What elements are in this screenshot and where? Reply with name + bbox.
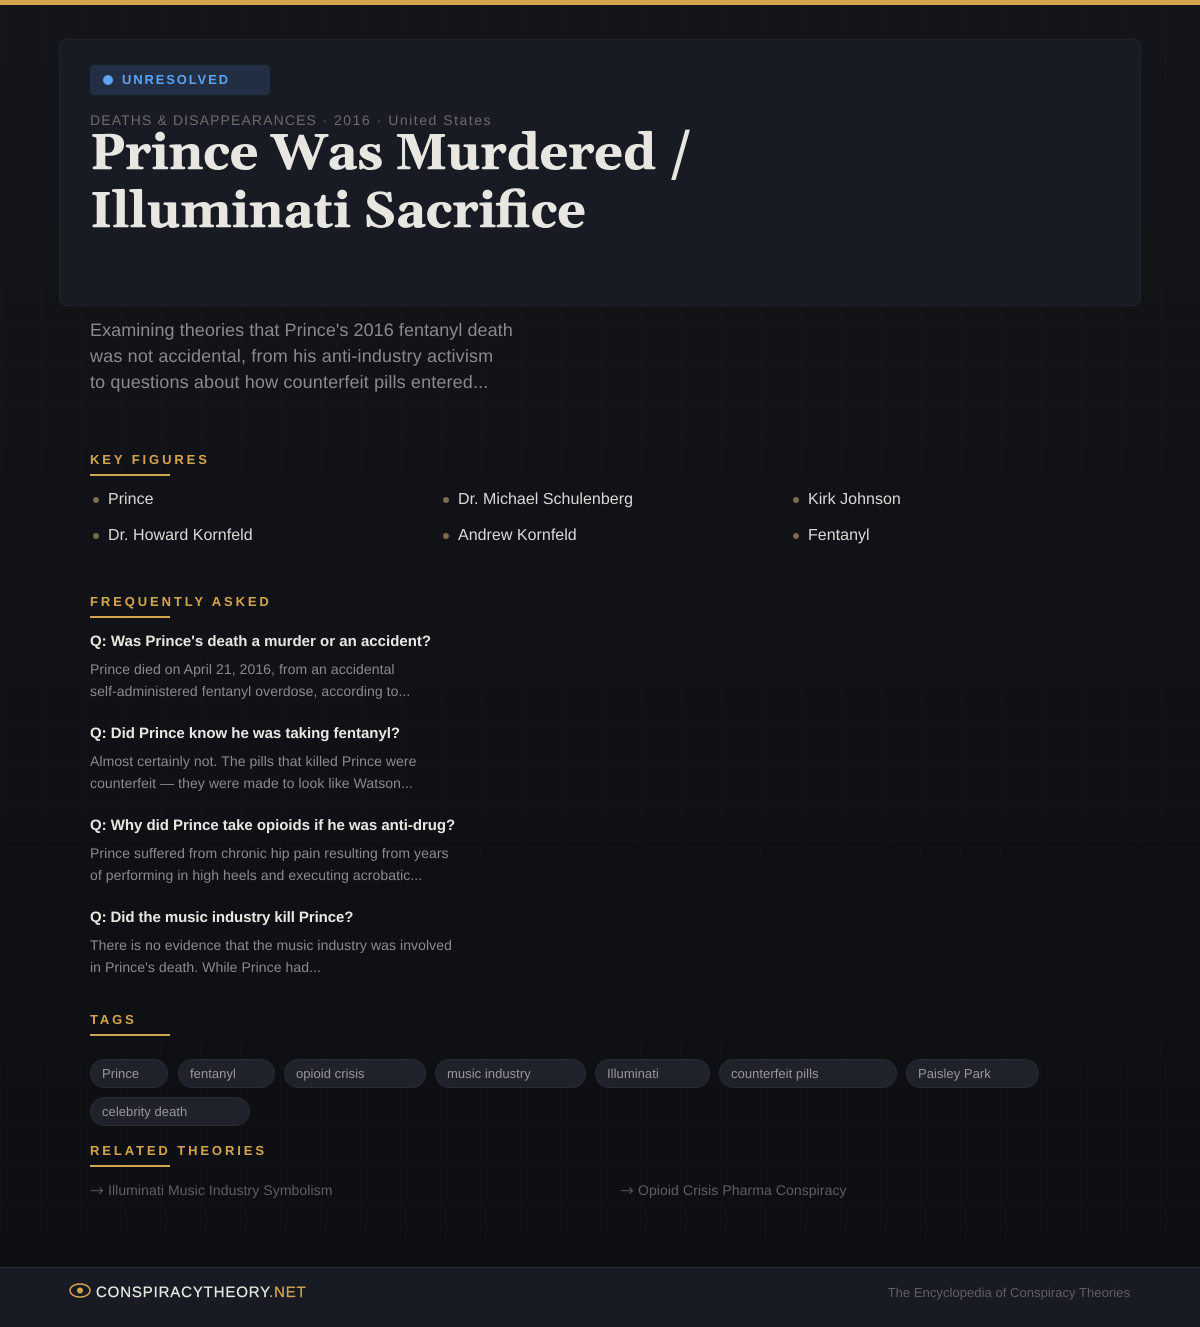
- tag: Prince: [90, 1059, 168, 1088]
- top accent bar: [0, 0, 1200, 5]
- faq: did he know: Q: Did Prince know he was taking fentanyl?: [90, 725, 400, 742]
- icon: status dot: [103, 75, 113, 85]
- tag: celebrity death: celebrity death: [102, 1104, 187, 1119]
- tag: Paisley Park: Paisley Park: [918, 1066, 991, 1081]
- faq: did he know: counterfeit — they were made to look like Watson...: [90, 775, 413, 791]
- faq: why opioids: [90, 817, 455, 883]
- title: [90, 124, 692, 245]
- figure: Prince: Prince: [108, 491, 154, 508]
- brand name: CONSPIRACYTHEORY.NET: [96, 1284, 307, 1301]
- footer tagline: The Encyclopedia of Conspiracy Theories: [888, 1285, 1130, 1300]
- tag: opioid crisis: [284, 1059, 426, 1088]
- related link: Illuminati Music Industry Symbolism: → Illuminati Music Industry Symbolism: [90, 1181, 332, 1201]
- icon: eye logo: [69, 1283, 91, 1298]
- summary text: [90, 320, 513, 392]
- tag: counterfeit pills: [719, 1059, 897, 1088]
- figure: Kirk Johnson: Kirk Johnson: [808, 491, 901, 508]
- faq: murder or accident: Prince died on April 21, 2016, from an accidental: [90, 661, 395, 677]
- title: Prince Was Murdered /: [90, 124, 692, 187]
- related link: Opioid Crisis Pharma Conspiracy: → Opioid Crisis Pharma Conspiracy: [620, 1181, 847, 1201]
- figure: Fentanyl: Fentanyl: [808, 527, 870, 544]
- faq: did he know: [90, 725, 417, 791]
- heading: key figures: KEY FIGURES: [90, 452, 210, 467]
- panel: hero header: [59, 39, 1141, 306]
- faq: murder or accident: [90, 633, 431, 699]
- tag: counterfeit pills: counterfeit pills: [731, 1066, 819, 1081]
- badge label: UNRESOLVED: [122, 72, 230, 87]
- status badge: unresolved: [90, 65, 270, 95]
- faq: murder or accident: Q: Was Prince's death a murder or an accident?: [90, 633, 431, 650]
- heading: related theories: RELATED THEORIES: [90, 1143, 267, 1158]
- panel: key figures list: [93, 491, 901, 544]
- faq: why opioids: of performing in high heels and executing acrobatic...: [90, 867, 422, 883]
- summary text: Examining theories that Prince's 2016 fentanyl death: [90, 320, 513, 340]
- category and date line: DEATHS & DISAPPEARANCES · 2016 · United States: [90, 112, 492, 128]
- faq: why opioids: Q: Why did Prince take opioids if he was anti-drug?: [90, 817, 455, 834]
- tag: opioid crisis: opioid crisis: [296, 1066, 365, 1081]
- title: Illuminati Sacrifice: [90, 182, 586, 245]
- heading: tags: TAGS: [90, 1012, 137, 1027]
- faq: murder or accident: self-administered fentanyl overdose, according to...: [90, 683, 410, 699]
- figure: Dr. Michael Schulenberg: Dr. Michael Schulenberg: [458, 491, 633, 508]
- faq: music industry: Q: Did the music industry kill Prince?: [90, 909, 353, 926]
- tag: celebrity death: [90, 1097, 250, 1126]
- tag: music industry: music industry: [447, 1066, 531, 1081]
- tag: Paisley Park: [906, 1059, 1039, 1088]
- faq: music industry: There is no evidence that the music industry was involved: [90, 937, 452, 953]
- tag: Illuminati: [595, 1059, 710, 1088]
- tag: fentanyl: fentanyl: [190, 1066, 236, 1081]
- tag: Prince: Prince: [102, 1066, 139, 1081]
- faq: did he know: Almost certainly not. The pills that killed Prince were: [90, 753, 417, 769]
- summary text: was not accidental, from his anti-industry activism: [90, 346, 493, 366]
- heading: frequently asked: FREQUENTLY ASKED: [90, 594, 272, 609]
- figure: Dr. Howard Kornfeld: Dr. Howard Kornfeld: [108, 527, 253, 544]
- tag: music industry: [435, 1059, 586, 1088]
- footer: [0, 1267, 1200, 1327]
- faq: music industry: [90, 909, 452, 975]
- faq: music industry: in Prince's death. While Prince had...: [90, 959, 321, 975]
- figure: Andrew Kornfeld: Andrew Kornfeld: [458, 527, 577, 544]
- faq: why opioids: Prince suffered from chronic hip pain resulting from years: [90, 845, 449, 861]
- tag: Illuminati: Illuminati: [607, 1066, 659, 1081]
- summary text: to questions about how counterfeit pills entered...: [90, 372, 488, 392]
- panel: tags: [90, 1059, 1039, 1126]
- tag: fentanyl: [178, 1059, 275, 1088]
